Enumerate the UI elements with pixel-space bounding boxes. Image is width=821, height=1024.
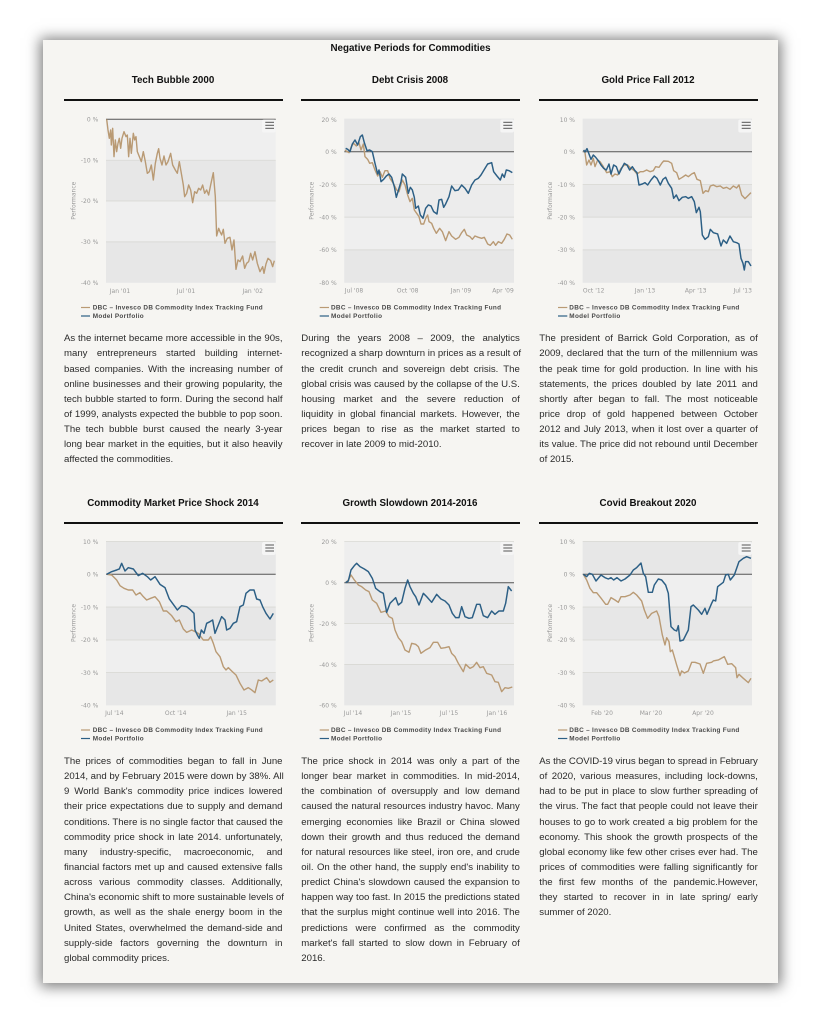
chart: Commodity Market Price Shock 2014: Jan '15 [225,710,247,717]
line: Model Portfolio [346,563,512,618]
chart: Growth Slowdown 2014-2016: Performance [309,604,316,642]
text: Growth Slowdown 2014-2016: 2016. [301,953,325,964]
chart: Commodity Market Price Shock 2014: 10 % [83,539,99,546]
chart: Gold Price Fall 2012: Performance [547,181,554,220]
chart: Tech Bubble 2000: -20 % [81,198,99,205]
text: Gold Price Fall 2012: 2009, declared that the turn of the millennium was [539,348,758,359]
text: Growth Slowdown 2014-2016: predictions were confirmed as the commodity [301,923,520,934]
legend: Model Portfolio [569,313,620,320]
text: Commodity Market Price Shock 2014: global commodity prices. [64,953,170,964]
chart: Growth Slowdown 2014-2016: Jul '14 [343,710,362,717]
text: Growth Slowdown 2014-2016: The price shock in 2014 was only a part of the [301,756,520,767]
chart: Growth Slowdown 2014-2016: -60 % [319,702,337,710]
text: Debt Crisis 2008: recognized a sharp downturn in prices as a result of [301,348,521,359]
text: Covid Breakout 2020: had to be put in place to slow further spreading of [539,786,758,797]
legend [558,305,739,320]
legend: Model Portfolio [93,736,144,742]
line: Model Portfolio [346,135,512,218]
chart: Covid Breakout 2020: Apr '20 [692,710,714,717]
chart: Debt Crisis 2008: -60 % [319,247,337,254]
chart: Debt Crisis 2008: -80 % [319,280,337,287]
chart: Tech Bubble 2000: 0 % [87,116,99,124]
text: Growth Slowdown 2014-2016: the combination of oversupply and low demand [301,786,520,797]
legend: Model Portfolio [331,313,382,320]
text: Growth Slowdown 2014-2016: down their growth and thus reduced the demand [301,832,520,843]
text: Commodity Market Price Shock 2014: financial factors met up and caused extensive falls [64,862,282,873]
chart: Gold Price Fall 2012: 0 % [564,149,575,156]
text: Tech Bubble 2000: affected the commodities. [64,454,173,465]
line: Model Portfolio [107,563,273,638]
line: DBC [345,143,512,245]
text: Growth Slowdown 2014-2016: for natural resources like steel, iron ore, and crude [301,847,520,858]
chart: Commodity Market Price Shock 2014: Oct '14 [165,710,187,717]
text: Covid Breakout 2020: they started to recover in in late spring/ early [539,892,758,903]
legend: Model Portfolio [331,736,382,742]
chart: Commodity Market Price Shock 2014: -10 % [81,604,99,612]
text: Covid Breakout 2020: economy. This shook the growth prospects of the [539,832,758,843]
text: Gold Price Fall 2012: The president of Barrick Gold Corporation, as of [539,333,758,344]
text: Tech Bubble 2000: of 1999, analysts expected the bubble to pop soon. [64,409,282,420]
legend: DBC – Invesco DB Commodity Index Tracking Fund [569,305,739,312]
text: Growth Slowdown 2014-2016: oil. On the other hand, the supply end's inability to [301,862,520,873]
icon: menu [500,542,514,555]
text: Covid Breakout 2020: the first few months of the pandemic.However, [539,877,758,888]
text: Debt Crisis 2008 [301,333,522,450]
text: Debt Crisis 2008: housing market and the severe reduction of [301,394,520,405]
chart: Commodity Market Price Shock 2014: 0 % [87,572,99,579]
text: Covid Breakout 2020: the virus. The fact that people could not leave their [539,801,758,812]
legend: DBC – Invesco DB Commodity Index Tracking Fund [93,305,263,312]
legend [320,727,501,742]
text: Commodity Market Price Shock 2014: 9 World Bank's commodity price indices lowered [64,786,282,797]
text: Covid Breakout 2020: houses to go to work created a big problem for the [539,817,758,828]
text: Tech Bubble 2000: long bear market in the equities, but it also heavily [64,439,282,450]
text: Covid Breakout 2020: global economy like few other crises ever had. The [539,847,758,858]
text: Gold Price Fall 2012: statements, the prices doubled by late 2011 and [539,379,758,390]
chart: Covid Breakout 2020 [547,539,752,742]
chart: Growth Slowdown 2014-2016: Jan '15 [390,710,411,717]
text: Commodity Market Price Shock 2014: The prices of commodities began to fall in June [64,756,282,767]
chart: Gold Price Fall 2012: Oct '12 [583,288,605,294]
text: Gold Price Fall 2012 [539,333,758,465]
chart: Growth Slowdown 2014-2016: 0 % [325,580,337,587]
heading: Gold Price Fall 2012: Gold Price Fall 2012 [601,74,695,86]
text: Tech Bubble 2000: tech bubble started to form. During the second half [64,394,282,405]
legend: DBC – Invesco DB Commodity Index Tracking Fund [569,727,739,734]
chart: Debt Crisis 2008: Jul '08 [344,288,363,294]
chart: Commodity Market Price Shock 2014: -40 % [81,702,99,710]
heading: Covid Breakout 2020: Covid Breakout 2020 [600,498,696,508]
chart: Covid Breakout 2020: 0 % [564,572,575,579]
text: Debt Crisis 2008: the credit crunch and sovereign debt crisis. The [301,364,520,374]
title: Negative Periods for Commodities [330,43,491,54]
chart: Debt Crisis 2008: Oct '08 [397,288,419,294]
heading: Growth Slowdown 2014-2016: Growth Slowdown 2014-2016 [342,498,478,508]
chart: Commodity Market Price Shock 2014 [70,539,276,742]
text: Tech Bubble 2000: online businesses and their growing popularity, the [64,379,282,390]
text: Gold Price Fall 2012: of 2015. [539,454,574,465]
legend: DBC – Invesco DB Commodity Index Tracking Fund [331,305,501,312]
text: Growth Slowdown 2014-2016: predict China's slowdown caused the expansion to [301,877,520,888]
text: Commodity Market Price Shock 2014: 2014, and by February 2015 were down by 38%. All [64,771,284,782]
text: Covid Breakout 2020: As the COVID-19 virus began to spread in February [539,756,758,767]
chart: Commodity Market Price Shock 2014: Jul '14 [104,710,124,717]
legend: DBC – Invesco DB Commodity Index Tracking Fund [331,727,501,734]
legend [558,727,739,742]
text: Growth Slowdown 2014-2016: that the surplus might continue well into 2016. The [301,907,520,918]
text: Tech Bubble 2000: As the internet became more accessible in the 90s, [64,333,282,344]
chart: Growth Slowdown 2014-2016: Jan '16 [486,710,507,717]
chart: Gold Price Fall 2012: -20 % [558,214,575,221]
chart: Covid Breakout 2020: -30 % [558,670,575,677]
text: Gold Price Fall 2012: the peak time for gold production. In line with his [539,364,758,374]
chart: Debt Crisis 2008: Jan '09 [450,288,471,294]
legend: Model Portfolio [93,313,144,320]
legend: DBC – Invesco DB Commodity Index Tracking Fund [93,727,263,734]
text: Gold Price Fall 2012: shortly after began to fall. The most noticeable [539,394,758,405]
line: Model Portfolio [584,149,751,270]
text: Tech Bubble 2000: based companies. With the increasing number of [64,364,282,374]
legend: Model Portfolio [569,736,620,742]
icon: menu [262,120,276,132]
text: Commodity Market Price Shock 2014: growth, as well as the shale energy boom in the [64,907,282,918]
text: Growth Slowdown 2014-2016: longer bear market in commodities. In mid-2014, [301,771,520,782]
chart: Gold Price Fall 2012: 10 % [560,117,575,124]
chart: Tech Bubble 2000: Jul '01 [176,288,195,295]
text: Tech Bubble 2000: The tech bubble burst caused the nearly 3-year [64,424,282,435]
chart: Covid Breakout 2020: -40 % [558,702,575,710]
chart: Gold Price Fall 2012: Jan '13 [634,288,655,294]
text: Tech Bubble 2000 [64,333,283,465]
chart: Growth Slowdown 2014-2016: -40 % [319,662,337,669]
icon: menu [738,120,752,132]
line: DBC [346,575,512,692]
text: Commodity Market Price Shock 2014 [64,756,284,964]
text: Growth Slowdown 2014-2016: market's fall started to slow down in February of [301,938,520,949]
chart: Debt Crisis 2008: 0 % [325,149,337,156]
chart: Covid Breakout 2020: Feb '20 [591,710,613,717]
heading: Debt Crisis 2008: Debt Crisis 2008 [372,74,448,86]
chart: Gold Price Fall 2012 [547,117,752,320]
text: Debt Crisis 2008: prices began to rise as the market started to [301,424,520,435]
text: Growth Slowdown 2014-2016: happen way too fast. In 2015 the predictions stated [301,892,520,903]
heading: Tech Bubble 2000: Tech Bubble 2000 [132,74,214,86]
text: Debt Crisis 2008: liquidity in global financial markets. However, the [301,409,520,420]
text: Gold Price Fall 2012: 2012 and July 2013, when it lost over a quarter of [539,424,758,435]
text: Commodity Market Price Shock 2014: supply-side factors governing the downturn in [64,938,282,949]
chart: Growth Slowdown 2014-2016 [309,539,514,742]
chart: Commodity Market Price Shock 2014: -30 % [81,670,99,677]
chart: Covid Breakout 2020: 10 % [560,539,575,546]
legend [81,305,263,320]
chart: Commodity Market Price Shock 2014: Performance [70,604,78,642]
chart: Covid Breakout 2020: Performance [547,604,554,642]
chart: Debt Crisis 2008: -40 % [319,214,337,221]
chart: Gold Price Fall 2012: -10 % [558,182,575,189]
chart: Debt Crisis 2008: Apr '09 [492,288,514,294]
text: Debt Crisis 2008: recover in late 2009 to mid-2010. [301,439,442,450]
chart: Tech Bubble 2000: -30 % [81,239,99,246]
text: Commodity Market Price Shock 2014: many industry-specific, macroeconomic, and [64,847,282,858]
text: Commodity Market Price Shock 2014: China's economic shift to more sustainable levels of [64,892,284,903]
text: Gold Price Fall 2012: price drop of gold happened between October [539,409,758,420]
text: Debt Crisis 2008: During the years 2008 – 2009, the analytics [301,333,520,344]
line: DBC [107,574,273,693]
text: Commodity Market Price Shock 2014: across various commodity classes. Additionally, [64,877,282,888]
text: Covid Breakout 2020: summer of 2020. [539,907,611,918]
legend [320,305,501,320]
text: Covid Breakout 2020 [539,756,758,918]
line: DBC [584,150,751,199]
text: Growth Slowdown 2014-2016: emerging economies like Brazil or China slowed [301,817,520,828]
legend [81,727,263,742]
text: Commodity Market Price Shock 2014: their price expectations due to supply and demand [64,801,282,812]
text: Tech Bubble 2000: many entrepreneurs started building internet- [64,348,282,359]
chart: Commodity Market Price Shock 2014: -20 % [81,637,99,644]
chart: Covid Breakout 2020: -10 % [558,604,575,612]
text: Commodity Market Price Shock 2014: United States, overwhelmed the demand-side and [64,923,282,934]
chart: Growth Slowdown 2014-2016: Jul '15 [439,710,458,717]
line: DBC [107,119,274,273]
chart: Gold Price Fall 2012: Jul '13 [732,288,752,294]
text: Covid Breakout 2020: of 2020, various measures, including lock-downs, [539,771,758,782]
heading: Commodity Market Price Shock 2014: Commodity Market Price Shock 2014 [87,498,259,508]
chart: Tech Bubble 2000: Performance [70,181,78,220]
line: Model Portfolio [583,557,751,641]
chart: Growth Slowdown 2014-2016: 20 % [321,539,337,546]
text: Gold Price Fall 2012: its value. The price did not rebound until December [539,439,758,450]
chart: Covid Breakout 2020: -20 % [558,637,575,644]
text: Commodity Market Price Shock 2014: commodity price shock in late 2014. unfortunately, [64,832,282,843]
chart: Debt Crisis 2008: 20 % [321,117,337,124]
chart: Tech Bubble 2000: Jan '01 [109,288,130,295]
text: Covid Breakout 2020: prices of commodities were falling significantly for [539,862,758,873]
text: Debt Crisis 2008: global crisis was caused by the collapse of the U.S. [301,379,520,390]
chart: Gold Price Fall 2012: Apr '13 [685,288,707,294]
chart: Tech Bubble 2000: -40 % [81,280,99,287]
icon: menu [500,120,514,132]
chart: Debt Crisis 2008: Performance [309,181,316,220]
icon: menu [262,542,276,555]
chart: Debt Crisis 2008 [309,117,514,320]
text: Commodity Market Price Shock 2014: conditions. There is no single factor that caused the [64,817,283,828]
icon: menu [738,542,752,555]
chart: Tech Bubble 2000: -10 % [81,157,99,164]
text: Growth Slowdown 2014-2016: caused the natural resources industry havoc. Many [301,801,520,812]
chart: Growth Slowdown 2014-2016: -20 % [319,621,337,628]
line: DBC [583,574,751,683]
chart: Gold Price Fall 2012: -30 % [558,247,575,254]
chart: Gold Price Fall 2012: -40 % [558,280,575,287]
text: Growth Slowdown 2014-2016 [301,756,520,964]
chart: Tech Bubble 2000: Jan '02 [241,288,263,295]
chart: Debt Crisis 2008: -20 % [319,182,337,189]
chart: Tech Bubble 2000 [70,116,276,320]
chart: Covid Breakout 2020: Mar '20 [640,710,662,717]
